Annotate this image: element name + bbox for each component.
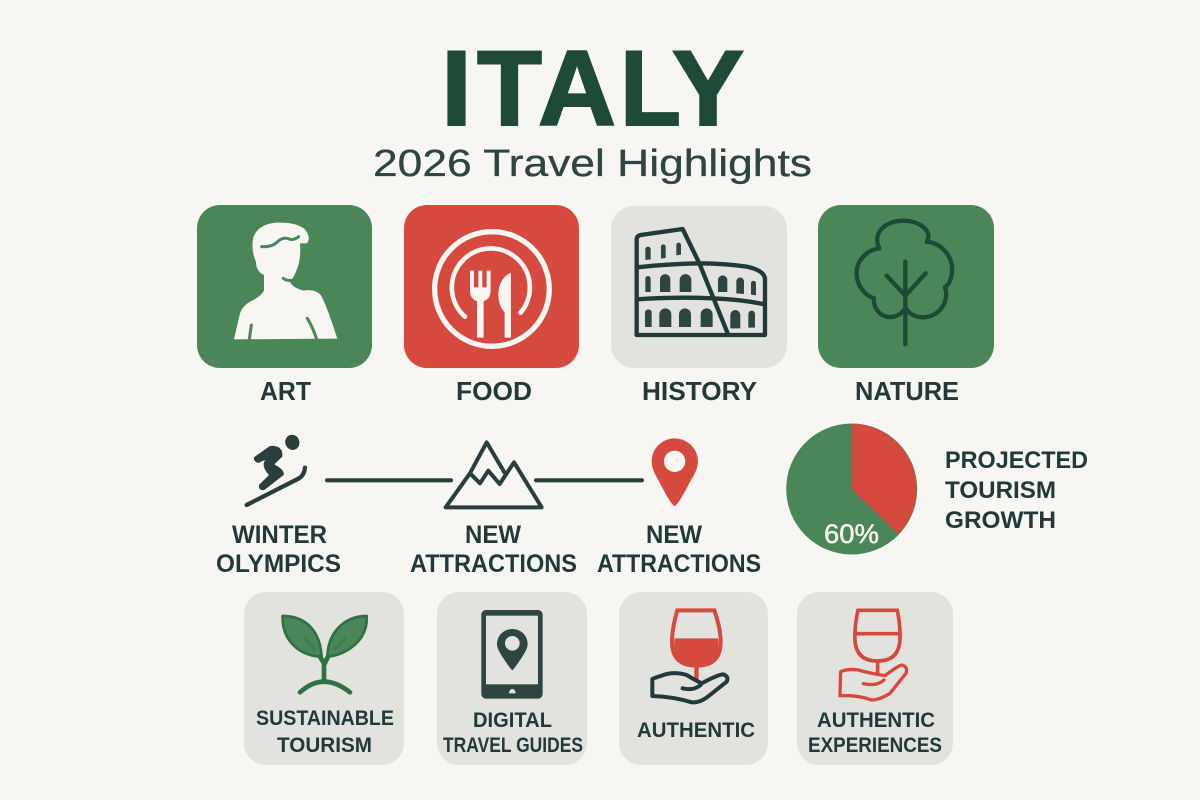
authentic tile	[619, 592, 768, 765]
title: Y	[672, 28, 744, 148]
icon: colosseum	[637, 229, 765, 335]
label: projected tourism growth: TOURISM	[945, 477, 1056, 504]
title: T	[477, 28, 542, 148]
panel: art	[197, 205, 372, 406]
history tile	[611, 206, 787, 368]
label: authentic: AUTHENTIC	[637, 718, 755, 742]
label: new attractions second: NEW	[646, 521, 702, 549]
label: sustainable tourism: TOURISM	[277, 733, 372, 757]
digital tile	[437, 592, 587, 765]
label: winter olympics: OLYMPICS	[216, 550, 341, 578]
icon: filled wine glass on hand	[652, 610, 727, 702]
panel: food	[404, 205, 579, 406]
panel: history	[611, 206, 787, 406]
connector line	[327, 478, 642, 482]
label: art: ART	[260, 376, 311, 406]
art tile	[197, 205, 372, 368]
panel: nature	[818, 205, 994, 406]
icon: map pin	[652, 438, 698, 506]
pie chart	[786, 424, 917, 554]
label: new attractions	[410, 521, 577, 578]
pie value: 60%	[824, 519, 879, 549]
experiences tile	[797, 592, 953, 765]
label: authentic experiences: EXPERIENCES	[808, 733, 942, 757]
title: I	[441, 28, 472, 148]
label: digital travel guides	[443, 708, 583, 757]
icon: mountains	[446, 442, 542, 507]
sustainable tile	[244, 592, 404, 765]
label: new attractions second	[597, 521, 761, 578]
icon: outlined wine glass on hand	[840, 610, 907, 700]
label: new attractions: ATTRACTIONS	[410, 550, 577, 578]
label: projected tourism growth: PROJECTED	[945, 447, 1088, 474]
icon: sprout	[283, 616, 367, 692]
label: authentic experiences	[808, 708, 942, 757]
label: sustainable tourism: SUSTAINABLE	[256, 706, 394, 730]
title: A	[538, 28, 616, 148]
label: digital travel guides: DIGITAL	[473, 708, 552, 732]
label: food: FOOD	[456, 376, 532, 406]
food tile	[404, 205, 579, 368]
label: winter olympics	[216, 521, 341, 578]
title: L	[620, 28, 681, 148]
subtitle: 2026 Travel Highlights	[373, 143, 812, 185]
panel: authentic experiences	[797, 592, 953, 765]
label: projected tourism growth	[945, 447, 1088, 534]
label: new attractions second: ATTRACTIONS	[597, 550, 761, 578]
label: digital travel guides: TRAVEL GUIDES	[443, 733, 583, 757]
panel: digital travel guides	[437, 592, 587, 765]
icon: tablet with pin	[481, 610, 543, 699]
panel: authentic	[619, 592, 768, 765]
panel: sustainable tourism	[244, 592, 404, 765]
label: history: HISTORY	[642, 376, 757, 406]
icon: tree	[857, 221, 952, 344]
timeline	[216, 433, 761, 578]
label: sustainable tourism	[256, 706, 394, 757]
pie: green share	[786, 424, 917, 554]
label: authentic experiences: AUTHENTIC	[817, 708, 935, 732]
icon: plate and cutlery	[435, 232, 549, 346]
icon: ski jumper	[247, 433, 305, 505]
pie: red share	[852, 424, 916, 534]
label: nature: NATURE	[855, 376, 959, 406]
title	[441, 28, 744, 148]
label: projected tourism growth: GROWTH	[945, 507, 1056, 534]
nature tile	[818, 205, 994, 368]
label: winter olympics: WINTER	[232, 521, 327, 549]
label: new attractions: NEW	[465, 521, 521, 549]
icon: bust	[234, 223, 337, 339]
